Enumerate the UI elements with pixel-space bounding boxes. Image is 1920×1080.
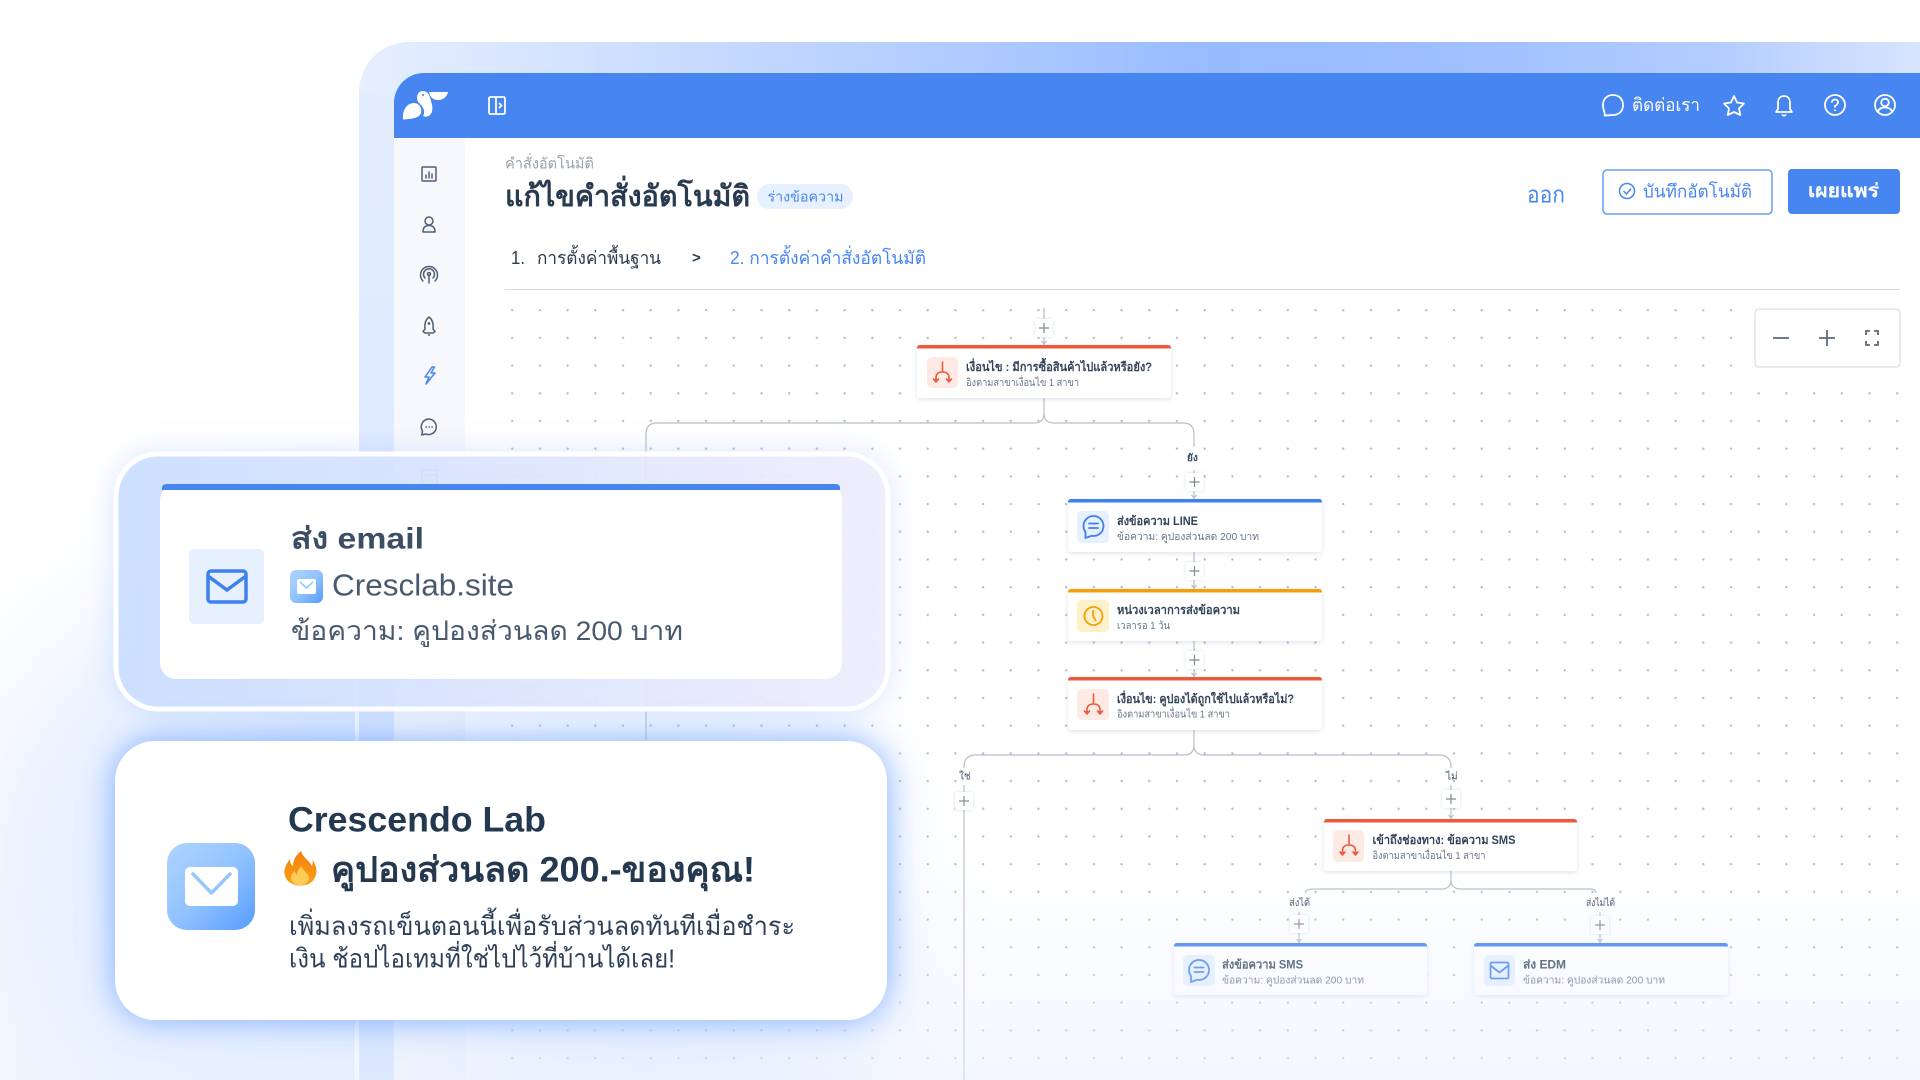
publish button: เผยแพร่ (1808, 181, 1880, 202)
node: condition coupon: อิงตามสาขาเงื่อนไข 1 สาขา (1117, 706, 1230, 720)
node: send EDM (1474, 943, 1728, 995)
steps: การตั้งค่าพื้นฐาน (537, 245, 661, 269)
draft tag: ร่างข้อความ (768, 188, 844, 204)
node: delay: เวลารอ 1 วัน (1117, 620, 1170, 632)
node: channel reach SMS: เข้าถึงช่องทาง: ข้อความ SMS (1372, 833, 1516, 847)
icon: user (1875, 95, 1895, 115)
add buttons (955, 319, 1609, 934)
publish button (1788, 169, 1900, 214)
branch labels (959, 452, 1615, 909)
icon: reports (422, 167, 436, 181)
header bar (394, 73, 1920, 138)
body copy: เงิน ช้อปไอเทมที่ใช่ไปไว้ที่บ้านได้เลย! (289, 940, 675, 974)
save button (1603, 170, 1772, 214)
steps: 1. (511, 248, 525, 268)
app window (394, 73, 1920, 1080)
sidebar (394, 139, 465, 1080)
body copy: เพิ่มลงรถเข็นตอนนี้เพื่อรับส่วนลดทันทีเมื่อชำระ (289, 907, 795, 941)
steps: > (692, 250, 701, 266)
icon: people (423, 217, 435, 232)
flow connectors (646, 308, 1602, 1080)
branch labels: ใช่ (959, 770, 971, 782)
node: send SMS (1174, 943, 1427, 995)
contact label: ติดต่อเรา (1632, 95, 1700, 115)
branch labels: ส่งไม่ได้ (1586, 897, 1615, 909)
zoom controls (1755, 309, 1900, 367)
node: send LINE (1068, 499, 1322, 552)
sender heading: Crescendo Lab (288, 800, 546, 840)
card inner (160, 484, 842, 679)
panel: notification card (115, 741, 887, 1020)
branch labels: ยัง (1187, 452, 1198, 464)
icon: star (1724, 96, 1744, 115)
icon: email app (167, 843, 255, 930)
breadcrumb: คำสั่งอัตโนมัติ (505, 152, 594, 172)
node: condition purchased (917, 345, 1171, 398)
steps: 2. การตั้งค่าคำสั่งอัตโนมัติ (730, 245, 926, 268)
icon: sender logo (290, 570, 323, 603)
exit link: ออก (1527, 182, 1565, 208)
node: send LINE: ข้อความ: คูปองส่วนลด 200 บาท (1117, 531, 1259, 543)
node: channel reach SMS: อิงตามสาขาเงื่อนไข 1 สาขา (1372, 848, 1486, 862)
sender name: Cresclab.site (332, 568, 514, 602)
node: send SMS: ข้อความ: คูปองส่วนลด 200 บาท (1222, 974, 1364, 986)
icon: sidebar toggle (489, 97, 505, 114)
heading: send email: ส่ง email (291, 522, 424, 556)
branch labels: ส่งได้ (1289, 897, 1310, 909)
plus signs (959, 323, 1605, 930)
icon: store (422, 470, 437, 486)
sidebar icons (420, 167, 438, 486)
icon: broadcast (420, 266, 438, 283)
node: delay: หน่วงเวลาการส่งข้อความ (1117, 603, 1240, 617)
steps (511, 245, 926, 269)
icon: rocket (423, 317, 435, 335)
icon: email tile (189, 549, 264, 624)
icon: chat (421, 419, 436, 435)
outer app frame (357, 40, 1920, 1080)
logo (403, 91, 448, 120)
icon: flame (284, 851, 316, 886)
node: condition coupon (1068, 677, 1322, 730)
node: condition coupon: เงื่อนไข: คูปองได้ถูกใช้ไปแล้วหรือไม่? (1117, 690, 1294, 707)
header actions (1603, 95, 1895, 116)
icon: bell (1776, 96, 1792, 116)
branch labels: ไม่ (1445, 770, 1458, 782)
node: delay (1068, 589, 1322, 641)
message line: ข้อความ: คูปองส่วนลด 200 บาท (291, 616, 683, 647)
node: send SMS: ส่งข้อความ SMS (1222, 958, 1303, 972)
save button: บันทึกอัตโนมัติ (1643, 180, 1752, 202)
node: condition purchased: อิงตามสาขาเงื่อนไข 1 สาขา (966, 375, 1079, 389)
icon: help (1825, 95, 1845, 115)
node: send EDM: ข้อความ: คูปองส่วนลด 200 บาท (1523, 974, 1665, 986)
node: send LINE: ส่งข้อความ LINE (1117, 514, 1198, 528)
page title: แก้ไขคำสั่งอัตโนมัติ (505, 175, 750, 213)
body copy (289, 907, 795, 974)
node: condition purchased: เงื่อนไข : มีการซื้อสินค้าไปแล้วหรือยัง? (966, 357, 1152, 374)
panel: send email card (116, 454, 888, 709)
icon: chat bubble (1603, 95, 1623, 116)
node: channel reach SMS (1324, 819, 1577, 871)
coupon heading: คูปองส่วนลด 200.-ของคุณ! (331, 850, 755, 892)
draft tag (757, 184, 853, 209)
node: send EDM: ส่ง EDM (1523, 958, 1566, 972)
icon: lightning (425, 367, 435, 384)
